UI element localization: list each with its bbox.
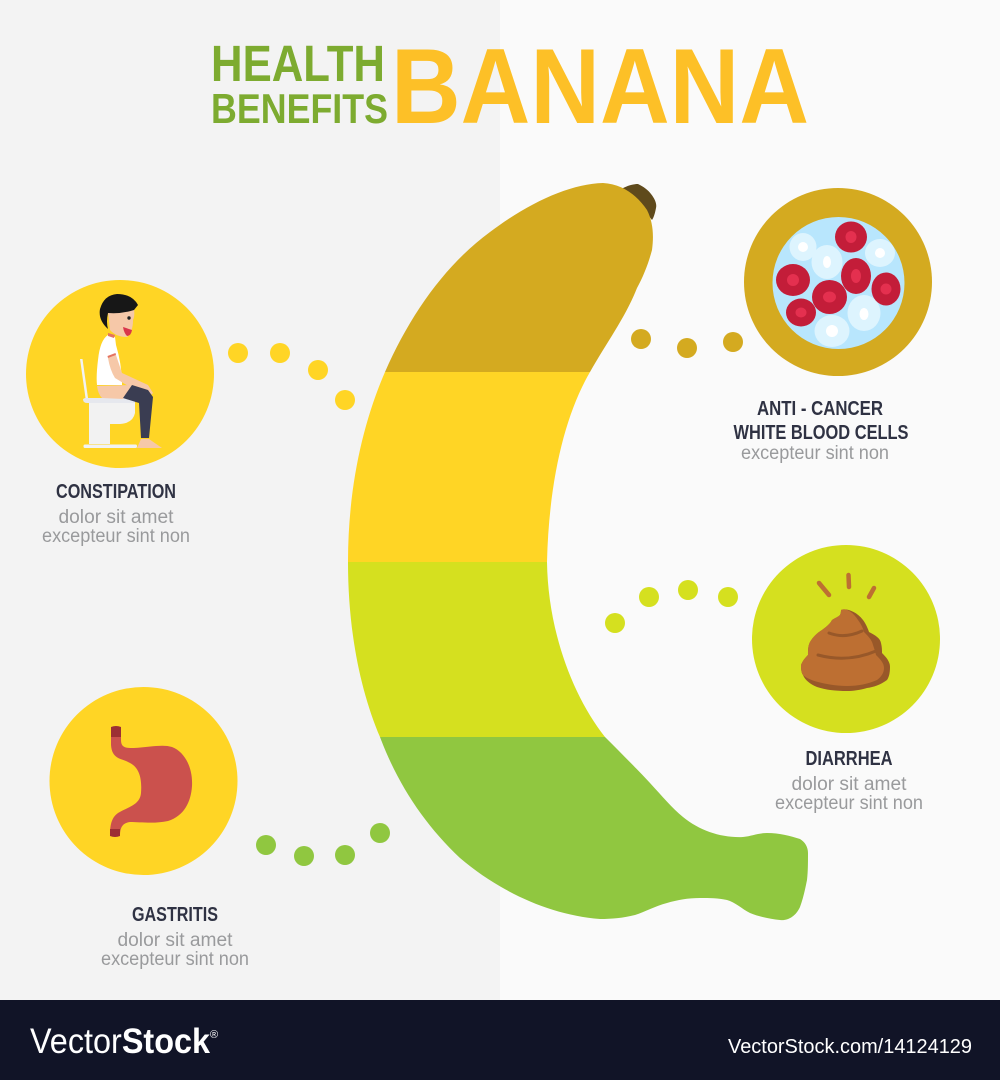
title: HEALTH <box>211 35 385 92</box>
label: diarrhea: DIARRHEA <box>806 748 892 770</box>
label: constipation: CONSTIPATION <box>56 481 176 503</box>
toilet <box>80 359 137 448</box>
footer bar <box>0 1000 1000 1080</box>
connector dots: anti-cancer <box>631 329 743 358</box>
connector dots: diarrhea <box>605 580 738 633</box>
connector dots: constipation <box>228 343 355 410</box>
label: gastritis: excepteur sint non <box>101 949 249 970</box>
label: constipation: dolor sit amet <box>58 507 174 528</box>
icon: stomach <box>50 687 238 875</box>
label: gastritis: dolor sit amet <box>118 930 233 951</box>
label: diarrhea: dolor sit amet <box>792 774 907 795</box>
banana band: top <box>385 183 653 372</box>
label: anti-cancer <box>734 398 908 464</box>
title: BANANA <box>391 26 809 146</box>
seated body <box>97 385 132 399</box>
label: constipation <box>42 481 190 547</box>
label: gastritis: GASTRITIS <box>132 904 218 926</box>
label: constipation: excepteur sint non <box>42 526 190 547</box>
footer registered mark: ® <box>210 1029 218 1041</box>
head <box>108 309 134 337</box>
label: diarrhea: excepteur sint non <box>775 793 923 814</box>
connector dots: gastritis <box>256 823 390 866</box>
label: gastritis <box>101 904 249 970</box>
title <box>211 26 809 146</box>
banana stem tip <box>620 184 656 220</box>
footer logo: VectorStock <box>30 1022 210 1061</box>
label: diarrhea <box>775 748 923 814</box>
label: anti-cancer: ANTI - CANCER <box>757 398 883 420</box>
banana band: upper middle <box>348 372 590 562</box>
footer image id: VectorStock.com/14124129 <box>728 1036 972 1058</box>
banana band: lower middle <box>348 562 605 737</box>
banana band: bottom <box>380 737 808 920</box>
banana <box>348 183 808 920</box>
label: anti-cancer: excepteur sint non <box>741 443 889 464</box>
icon: person on toilet <box>26 280 214 468</box>
title: BENEFITS <box>211 85 388 132</box>
label: anti-cancer: WHITE BLOOD CELLS <box>734 422 908 444</box>
icon: blood cells <box>744 188 932 376</box>
icon: poop <box>752 545 940 733</box>
